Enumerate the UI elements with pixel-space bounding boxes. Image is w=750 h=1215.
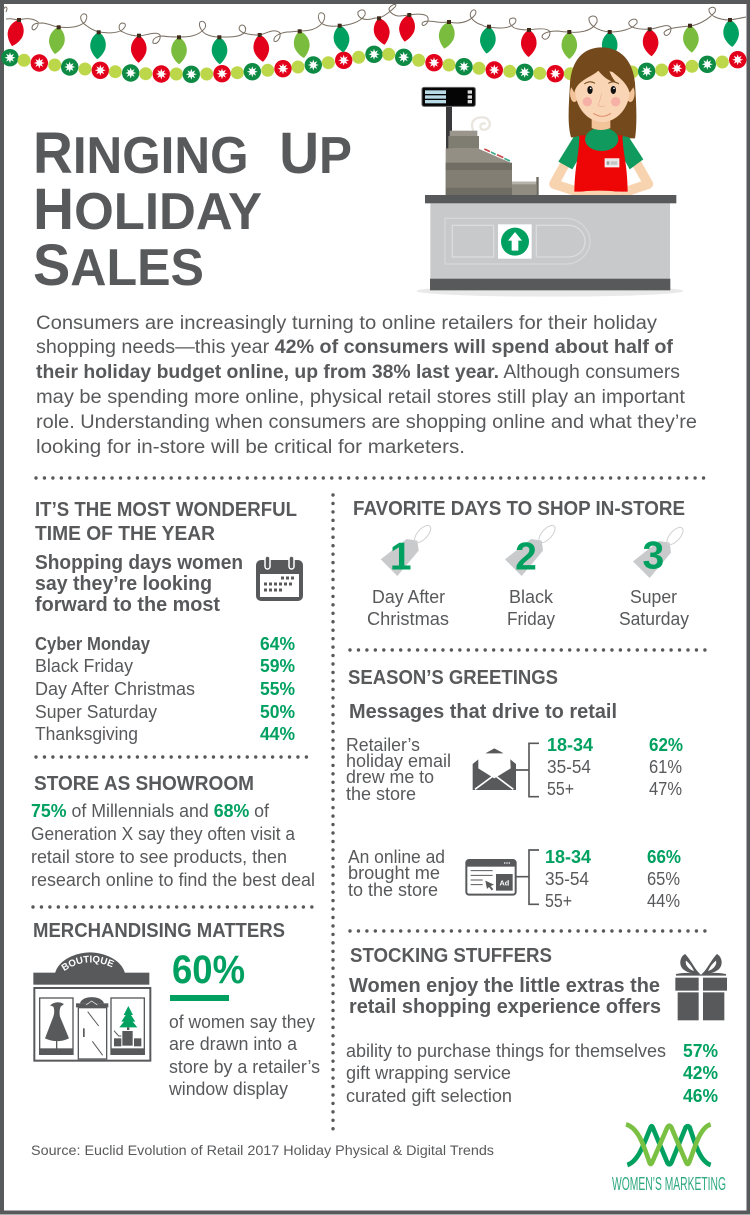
ranked shopping days list: Thanksgiving (35, 724, 138, 744)
ranked shopping days list: 44% (260, 724, 295, 744)
subheading: say they’re looking (35, 573, 212, 595)
online ad message label: brought me (348, 863, 440, 883)
ranked shopping days list: 64% (260, 634, 295, 654)
intro paragraph: Consumers are increasingly turning to online retailers for their holiday (36, 313, 658, 334)
icon: counter shadow (417, 285, 683, 297)
ranked shopping days list: Cyber Monday (35, 634, 150, 654)
labels: Super (630, 587, 677, 607)
labels: Saturday (619, 609, 689, 629)
email age breakdown: 55+ (547, 779, 574, 799)
list of retail extras: 57% (683, 1041, 718, 1061)
online ad age breakdown: 44% (647, 891, 680, 911)
list of retail extras: 46% (683, 1086, 718, 1106)
icon: cash register (422, 87, 539, 195)
icon: boutique storefront: BOUTIQUE (61, 956, 114, 971)
online ad age breakdown: 55+ (545, 891, 572, 911)
heading: STORE AS SHOWROOM (34, 773, 254, 795)
icon: boutique storefront (33, 952, 152, 1062)
title (33, 121, 352, 298)
ranked shopping days list: Black Friday (35, 656, 133, 676)
panel: most wonderful time of the year (35, 499, 303, 744)
email age breakdown: 61% (649, 757, 682, 777)
subheading: Messages that drive to retail (349, 701, 617, 723)
panel: stocking stuffers (346, 945, 727, 1106)
icon: price tag 3: 3 (642, 534, 664, 577)
intro paragraph: shopping needs—this year 42% of consumers will spend about half of (36, 337, 674, 358)
icon: gift box (675, 954, 727, 1020)
body text: retail store to see products, then (31, 847, 287, 867)
ranked shopping days list: 50% (260, 702, 295, 722)
intro paragraph: looking for in-store will be critical for marketers. (36, 437, 465, 458)
intro paragraph: may be spending more online, physical retail stores still play an important (36, 387, 686, 408)
panel: season's greetings (346, 667, 683, 911)
labels: Day After (372, 587, 445, 607)
subheading: retail shopping experience offers (349, 996, 661, 1018)
online ad age breakdown: 66% (647, 847, 681, 867)
heading: MERCHANDISING MATTERS (33, 920, 285, 942)
body text: are drawn into a (169, 1034, 298, 1054)
icon: browser ad with bracket: Ad (499, 878, 509, 887)
icon: counter (425, 195, 676, 290)
string of ball lights (1, 46, 746, 83)
email age breakdown: 47% (649, 779, 682, 799)
list of retail extras: ability to purchase things for themselves (346, 1041, 666, 1061)
list of retail extras: 42% (683, 1063, 718, 1083)
email message label (346, 735, 451, 804)
subheading: Shopping days women (35, 552, 243, 574)
online ad age breakdown: 35-54 (545, 869, 589, 889)
online ad age breakdown (545, 847, 681, 911)
heading: FAVORITE DAYS TO SHOP IN-STORE (353, 498, 685, 520)
body text: Generation X say they often visit a (31, 824, 296, 844)
email age breakdown: 18-34 (547, 735, 593, 755)
body text (31, 801, 315, 890)
title: RINGING UP (33, 121, 352, 186)
cashier illustration: register, clerk and counter (417, 47, 683, 297)
labels: Christmas (367, 609, 449, 629)
subheading (35, 552, 243, 616)
email message label: holiday email (346, 751, 451, 771)
online ad age breakdown: 65% (647, 869, 680, 889)
ranked shopping days list: Super Saturday (35, 702, 157, 722)
icon: price tag 1: 1 (390, 535, 412, 578)
body text: 75% of Millennials and 68% of (31, 801, 270, 821)
email age breakdown: 62% (649, 735, 683, 755)
panel: favorite days to shop in-store (353, 498, 689, 629)
body text: research online to find the best deal (31, 870, 315, 890)
online ad message label: to the store (348, 880, 438, 900)
icon: price tag 2: 2 (515, 535, 537, 578)
ranked shopping days list: 59% (260, 656, 295, 676)
panel: store as showroom (31, 773, 315, 890)
body text: of women say they (169, 1012, 315, 1032)
email age breakdown (547, 735, 683, 799)
title: SALES (33, 233, 204, 298)
online ad message label: An online ad (348, 847, 445, 867)
icon: price tag 2 (505, 523, 558, 578)
icon: price tag 3 (633, 525, 686, 578)
source note: Source: Euclid Evolution of Retail 2017 Holiday Physical & Digital Trends (31, 1143, 494, 1158)
list of retail extras (346, 1041, 718, 1106)
online ad age breakdown: 18-34 (545, 847, 591, 867)
icon: browser ad with bracket (466, 850, 539, 904)
email message label: drew me to (346, 767, 434, 787)
body text (168, 1012, 320, 1099)
email age breakdown: 35-54 (547, 757, 591, 777)
intro paragraph: their holiday budget online, up from 38% last year. Although consumers (36, 362, 680, 383)
icon: envelope with bracket (473, 743, 539, 797)
heading: IT’S THE MOST WONDERFUL (35, 499, 297, 521)
ranked shopping days list: 55% (260, 679, 295, 699)
email message label: the store (346, 784, 416, 804)
panel: merchandising matters (33, 920, 320, 1099)
ranked shopping days list: Day After Christmas (35, 679, 195, 699)
list of retail extras: gift wrapping service (346, 1063, 511, 1083)
statistic: 60%: 60% (172, 948, 245, 992)
intro paragraph (36, 313, 697, 458)
ranked shopping days list (35, 634, 295, 744)
heading: TIME OF THE YEAR (35, 523, 216, 545)
heading: SEASON’S GREETINGS (348, 667, 558, 689)
labels (367, 587, 689, 629)
title: HOLIDAY (33, 177, 262, 242)
list of retail extras: curated gift selection (346, 1086, 512, 1106)
icon: clerk (554, 47, 648, 197)
body text: store by a retailer’s (169, 1057, 320, 1077)
subheading: Women enjoy the little extras the (349, 975, 660, 997)
logo: Women's Marketing (612, 1124, 726, 1194)
subheading: forward to the most (35, 594, 220, 616)
labels: Black (509, 587, 554, 607)
intro paragraph: role. Understanding when consumers are shopping online and what they’re (36, 412, 697, 433)
icon: price tag 1 (381, 523, 434, 578)
string of bulb lights (4, 4, 746, 64)
body text: window display (168, 1079, 288, 1099)
labels: Friday (507, 609, 555, 629)
heading (35, 499, 297, 545)
accent bar (170, 995, 229, 1001)
icon: calendar (256, 556, 303, 601)
subheading (349, 975, 661, 1018)
heading: STOCKING STUFFERS (350, 945, 552, 967)
online ad message label (348, 847, 445, 900)
email message label: Retailer’s (346, 735, 420, 755)
